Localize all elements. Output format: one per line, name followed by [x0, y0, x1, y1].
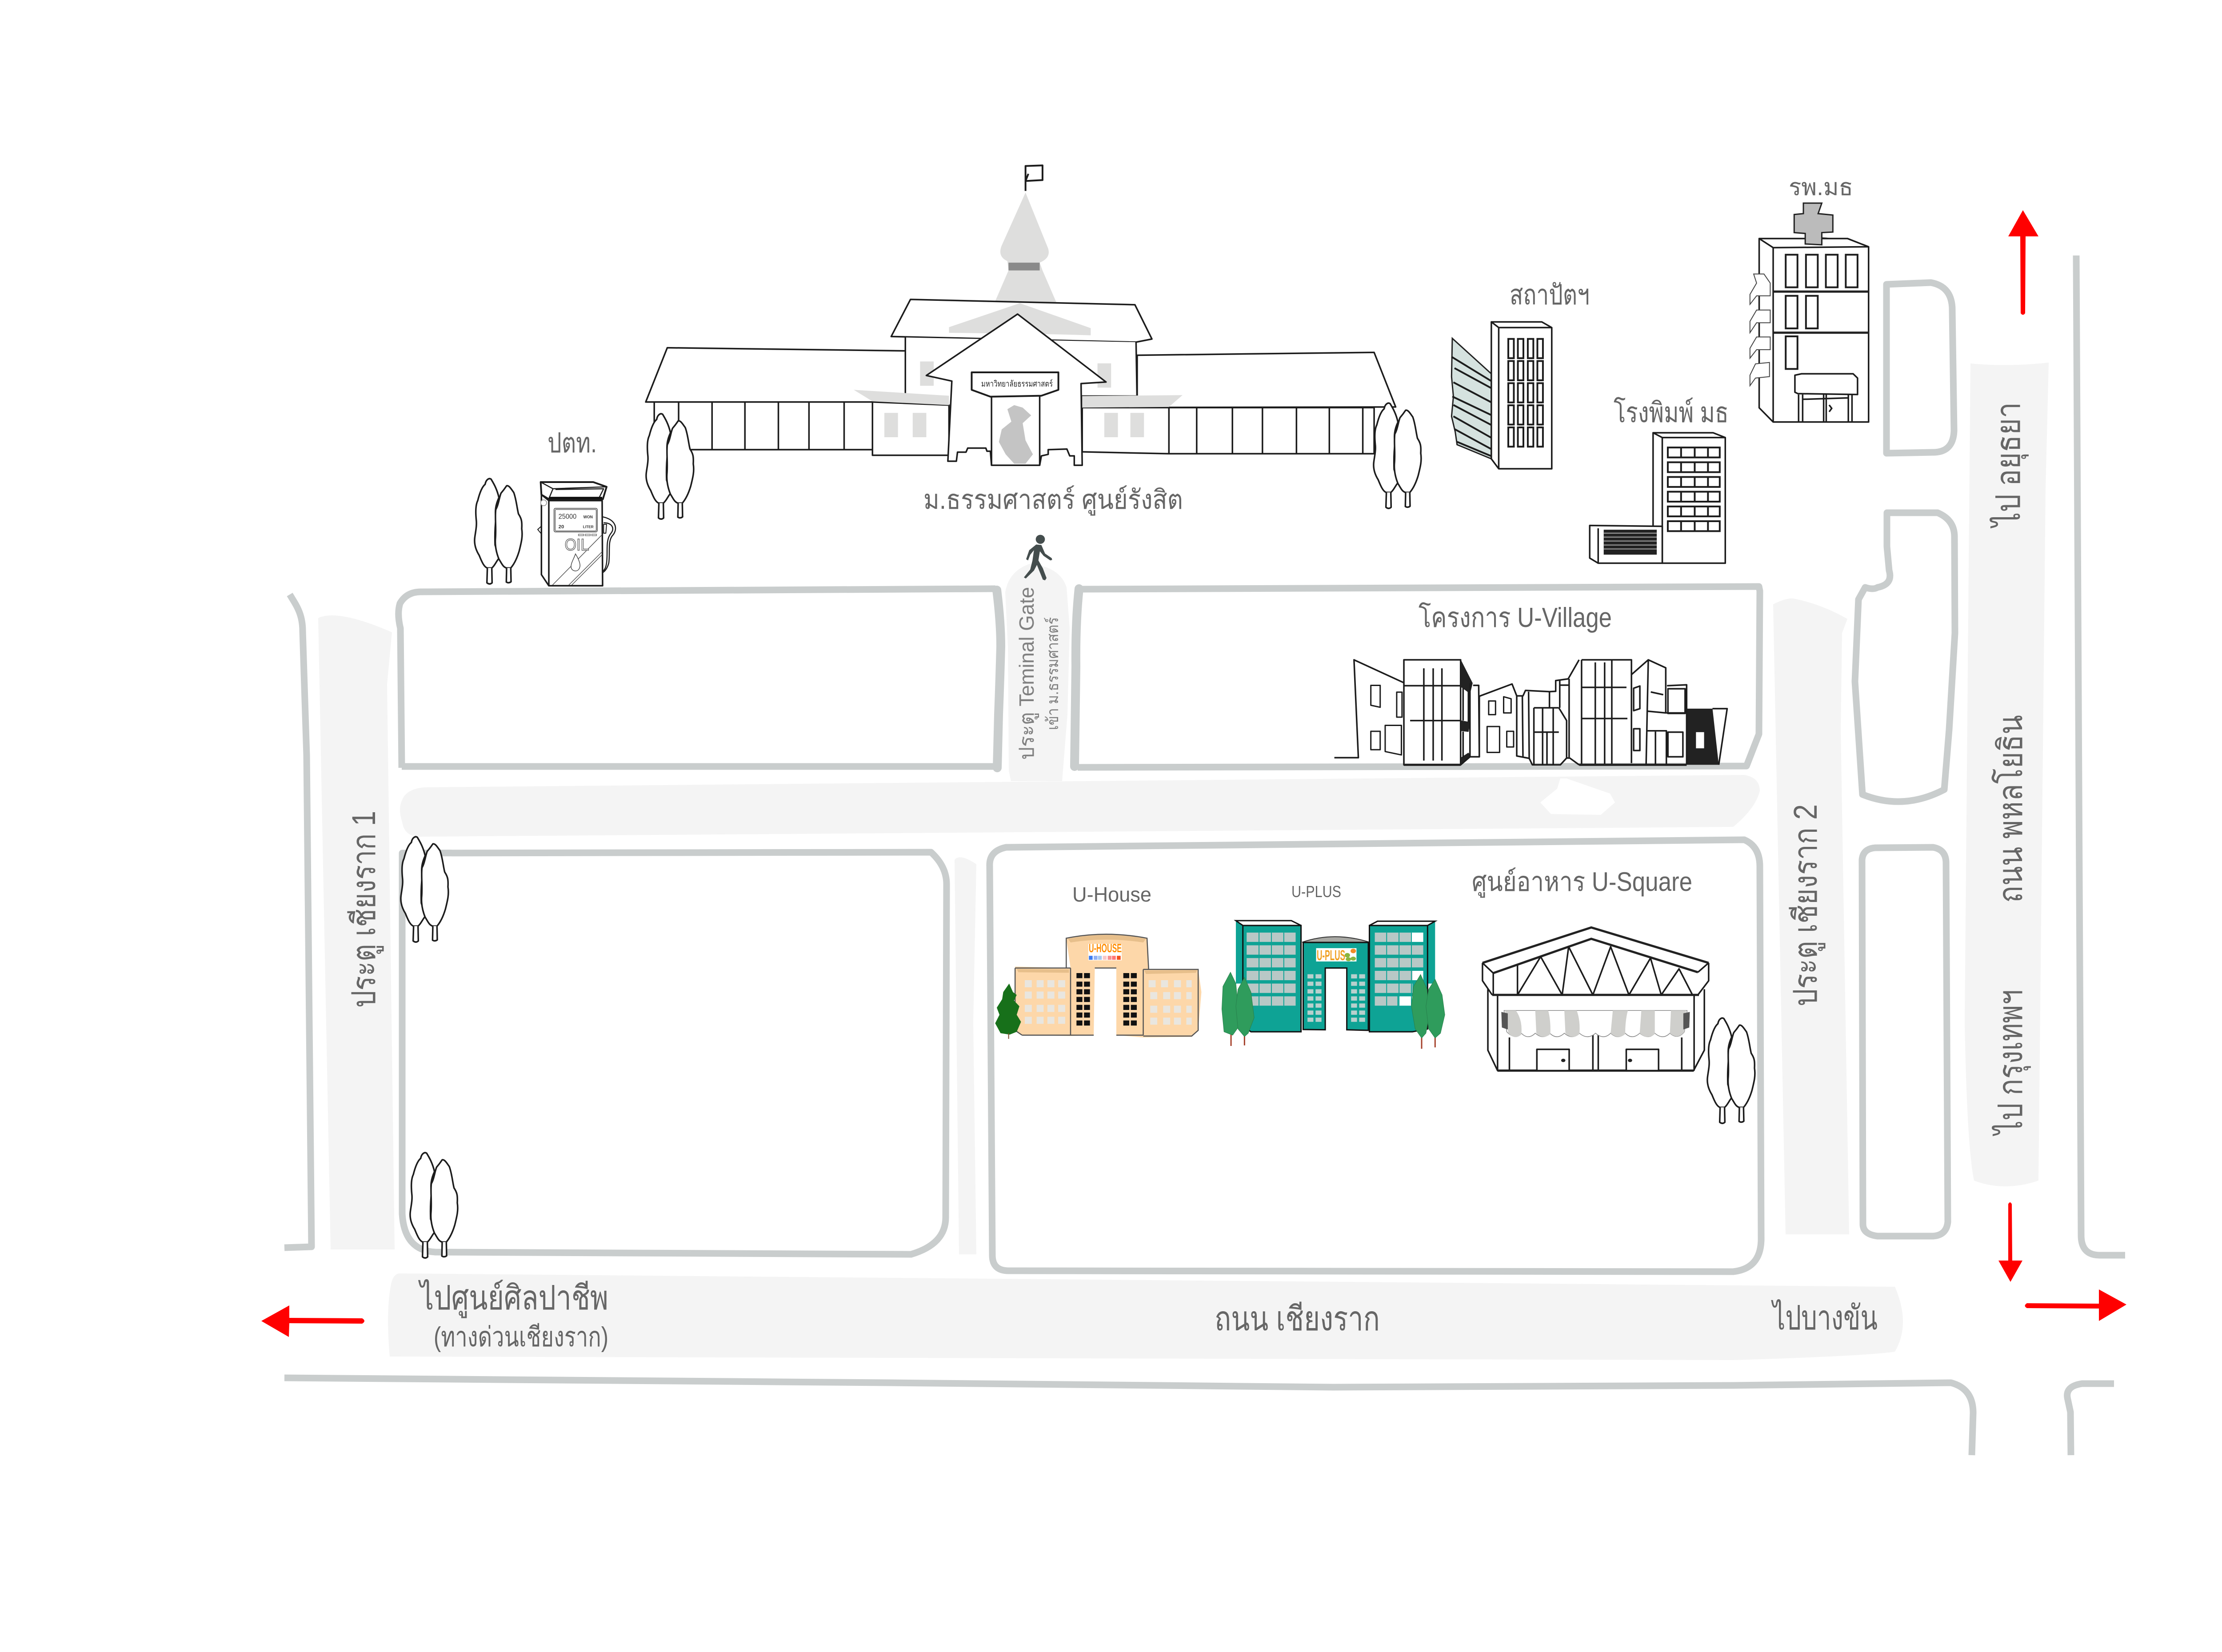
U-Plus sign text: U-PLUS: [1317, 947, 1345, 963]
label: enter Thammasat: เข้า ม.ธรรมศาสตร์: [1043, 617, 1062, 730]
trees top of lower-left block: [401, 837, 448, 942]
road: Chiang Rak road: [388, 1273, 1903, 1360]
arrow: west: [261, 1305, 364, 1337]
hospital side balconies: [1750, 274, 1770, 386]
road: lane between blocks: [955, 857, 976, 1254]
arrow: north to Ayutthaya: [2008, 210, 2038, 315]
outline: right island with notch: [1855, 513, 1955, 802]
road: Chiang Rak gate 1: [318, 615, 395, 1249]
outline: bottom kerb: [284, 1378, 1973, 1455]
arrow: east: [2025, 1289, 2126, 1321]
icon: walking person: [1024, 535, 1052, 580]
label: to arts centre: ไปศูนย์ศิลปาชีพ: [418, 1279, 608, 1318]
label: hospital: รพ.มธ: [1789, 175, 1853, 200]
label: expressway: (ทางด่วนเชียงราก): [434, 1322, 608, 1353]
bear statue: [999, 405, 1033, 464]
label: gate 2: ประตู เชียงราก 2: [1787, 804, 1826, 1006]
label: Chiang Rak road: ถนน เชียงราก: [1215, 1300, 1380, 1338]
trees left of main building: [646, 414, 694, 519]
road: Phahonyothin: [1965, 363, 2049, 1186]
building: U-House: [995, 934, 1201, 1039]
building: hospital: [1750, 203, 1869, 422]
building: U-Village: [1335, 660, 1727, 765]
pine tree: [995, 984, 1021, 1034]
label: gate 1: ประตู เชียงราก 1: [345, 811, 384, 1008]
outline: upper-left block: [399, 589, 997, 768]
label: Phahonyothin road: ถนน พหลโยธิน: [1991, 715, 2030, 903]
label: Terminal gate: ประตู Teminal Gate: [1015, 587, 1039, 760]
icon: petrol pump: LITER: [583, 525, 594, 529]
outline: U-Village block gate side: [1075, 589, 1079, 766]
U-House sign text: U-HOUSE: [1089, 942, 1122, 955]
hospital cross: [1794, 203, 1833, 245]
outline: top-right island: [1886, 283, 1954, 453]
sign panel: [971, 372, 1059, 397]
icon: petrol pump: 20: [559, 524, 564, 530]
trees right of main building: [1374, 403, 1421, 508]
label: to Bangkok: ไป กรุงเทพฯ: [1991, 990, 2031, 1137]
outline: upper-left block gate side: [997, 590, 1001, 768]
outline: lower-middle block: [990, 840, 1761, 1272]
building: printing house: [1590, 433, 1725, 563]
label: U-Square: ศูนย์อาหาร U-Square: [1472, 867, 1692, 898]
upper roof: [891, 299, 1152, 342]
icon: petrol pump: WON: [583, 515, 593, 519]
entrance gable: [926, 314, 1106, 465]
trees bottom of lower-left block: [410, 1153, 458, 1258]
sign text: มหาวิทยาลัยธรรมศาสตร์: [981, 379, 1053, 389]
outline: lower-right island: [1862, 847, 1948, 1236]
label: printing house: โรงพิมพ์ มธ: [1614, 397, 1729, 428]
right wing: [1082, 352, 1396, 407]
outline: left outer kerb: [284, 595, 312, 1248]
outline: U-Village block: [1078, 587, 1760, 767]
label: to Ayutthaya: ไป อยุธยา: [1989, 402, 2029, 529]
label: to Bang Khan: ไปบางขัน: [1771, 1299, 1878, 1337]
labels: [345, 175, 2031, 1353]
building: U-Plus: [1222, 921, 1445, 1049]
label: U-Plus: U-PLUS: [1291, 882, 1341, 901]
icon: flag and spire of main building: [994, 165, 1057, 303]
road: Terminal gate: [1005, 564, 1070, 781]
trees by food court: [1707, 1018, 1755, 1123]
label: PTT: ปตท.: [548, 428, 597, 459]
road: inner horizontal: [400, 775, 1760, 837]
trees beside petrol pump: [475, 479, 522, 584]
building: architecture faculty with striped wing: [1451, 322, 1552, 469]
label: Thammasat Rangsit: ม.ธรรมศาสตร์ ศูนย์รังสิต: [923, 485, 1183, 516]
awning: [1504, 1010, 1687, 1037]
icon: petrol pump: [538, 482, 615, 586]
outline: far right kerb: [2076, 255, 2125, 1255]
label: U-House: U-House: [1072, 883, 1151, 906]
label: U-Village: โครงการ U-Village: [1419, 602, 1612, 633]
left wing: [646, 348, 905, 402]
U-House wing windows: [1025, 980, 1192, 1025]
road network: [284, 255, 2125, 1455]
label: architecture: สถาปัตฯ: [1510, 279, 1590, 311]
central hall walls: [905, 337, 1137, 407]
outline: lower-left block: [402, 852, 947, 1254]
main university building: [646, 299, 1396, 465]
building: U-Square food court: [1483, 927, 1709, 1071]
icon: petrol pump: 25000: [559, 513, 576, 520]
hospital entrance: [1795, 374, 1858, 395]
road: Chiang Rak gate 2: [1773, 599, 1849, 1234]
icon: petrol pump: OIL: [565, 535, 589, 554]
U-Plus tower windows: [1247, 933, 1423, 1006]
arrow: south to Bangkok: [1998, 1202, 2022, 1282]
U-Plus trees: [1231, 1034, 1435, 1049]
U-House black windows: [1076, 973, 1137, 1026]
outline: bottom right corner kerb: [2067, 1384, 2114, 1455]
grey porches and windows: [854, 390, 949, 405]
